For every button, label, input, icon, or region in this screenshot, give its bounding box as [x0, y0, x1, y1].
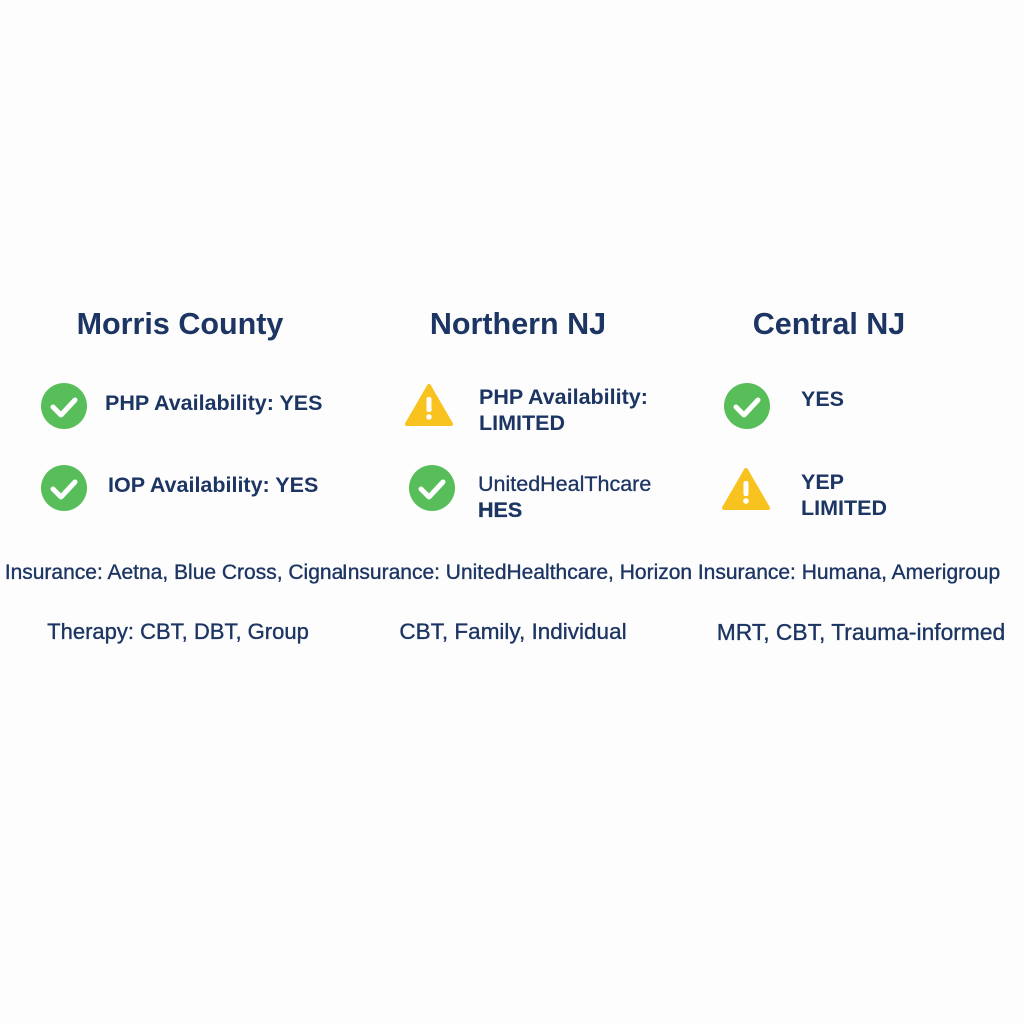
text: Northern PHP: LIMITED [479, 411, 565, 435]
heading: Morris County: Morris County [77, 307, 283, 341]
text: insurance Northern: Insurance: UnitedHealthcare, Horizon [342, 561, 692, 584]
text: Northern PHP: PHP Availability: [479, 385, 648, 409]
heading: Northern NJ: Northern NJ [430, 307, 606, 341]
text: Central second: LIMITED [801, 496, 887, 520]
text: therapy Northern: CBT, Family, Individual [399, 619, 627, 644]
text: Northern PHP [479, 385, 648, 435]
text: Morris PHP: PHP Availability: YES [105, 391, 322, 415]
text: insurance Morris: Insurance: Aetna, Blue Cross, Cigna [5, 561, 343, 584]
heading: Central NJ: Central NJ [753, 307, 905, 341]
icon: check Morris PHP [41, 383, 87, 429]
text: Central second: YEP [801, 470, 844, 494]
text: therapy Morris: Therapy: CBT, DBT, Group [47, 619, 309, 644]
icon: check Morris IOP [41, 465, 87, 511]
text: Central second [801, 470, 887, 520]
text: Northern second: UnitedHealThcare [478, 472, 651, 496]
text: Northern second [478, 472, 651, 522]
icon: check Central [724, 383, 770, 429]
icon: warning Central [722, 468, 770, 510]
text: Central YES: YES [801, 387, 844, 411]
text: insurance Central: Insurance: Humana, Amerigroup [698, 561, 1000, 584]
icon: check Northern [409, 465, 455, 511]
text: therapy Central: MRT, CBT, Trauma-informed [717, 619, 1005, 645]
text: Morris IOP: IOP Availability: YES [108, 473, 318, 497]
icon: warning Northern PHP [405, 384, 453, 426]
text: Northern second: HES [478, 498, 522, 522]
